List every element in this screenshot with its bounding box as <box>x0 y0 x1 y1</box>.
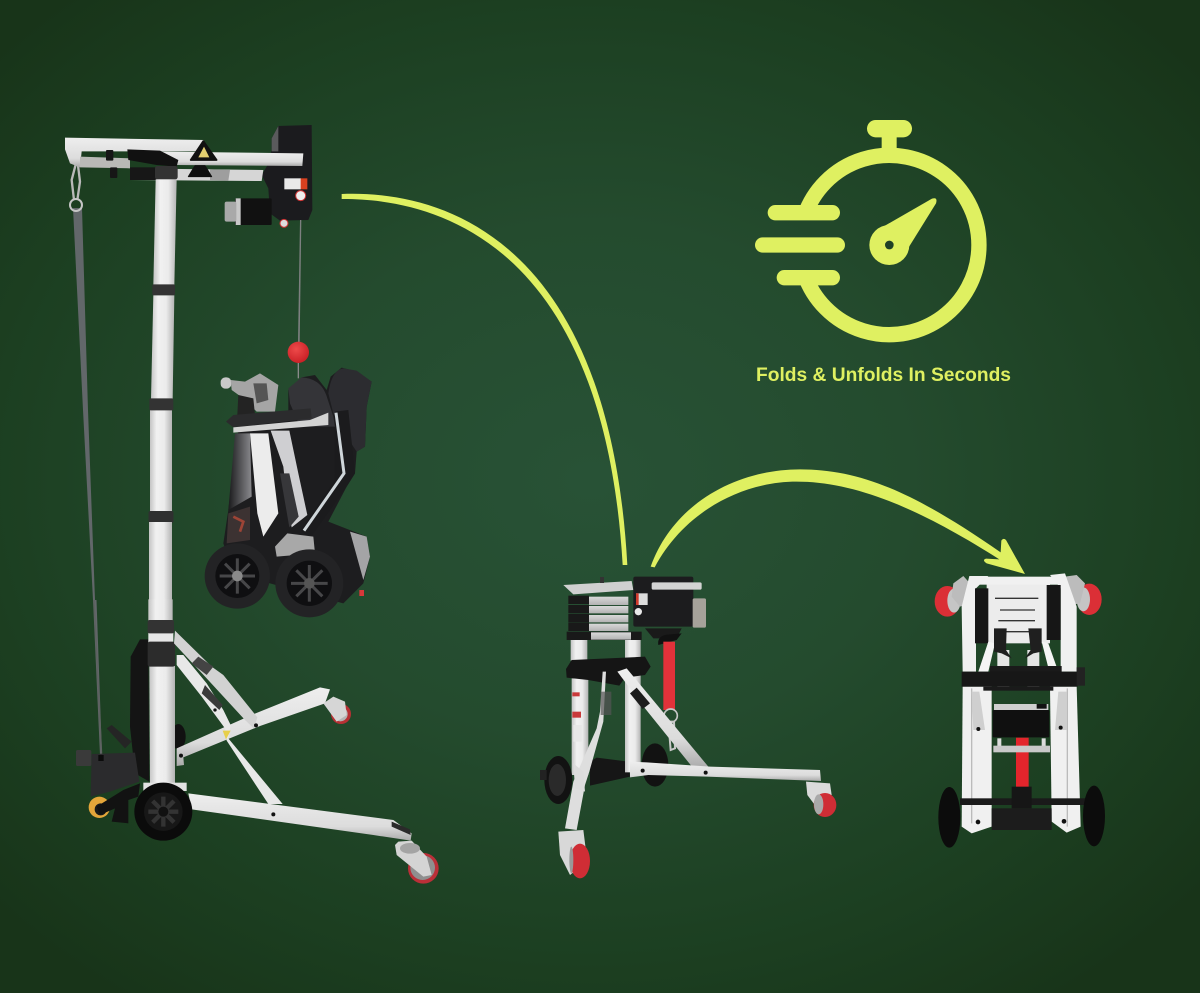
icon: stopwatch with speed lines <box>755 120 979 335</box>
column middle sections <box>148 410 174 622</box>
product: folded lift front view <box>935 573 1105 848</box>
lift upper boom and motor <box>65 125 312 410</box>
lift strap <box>73 208 102 755</box>
lift base, casters and wheels <box>76 599 439 884</box>
product: folded lift side view <box>540 577 836 878</box>
arrow: lift to folded lift <box>342 194 627 565</box>
caption: folds and unfolds: Folds & Unfolds In Seconds <box>756 365 1011 386</box>
product: extended lift with hanging scooter <box>65 125 439 884</box>
folded scooter hanging from hoist <box>205 368 372 617</box>
arrow: folded side view to folded front view <box>651 469 1025 574</box>
